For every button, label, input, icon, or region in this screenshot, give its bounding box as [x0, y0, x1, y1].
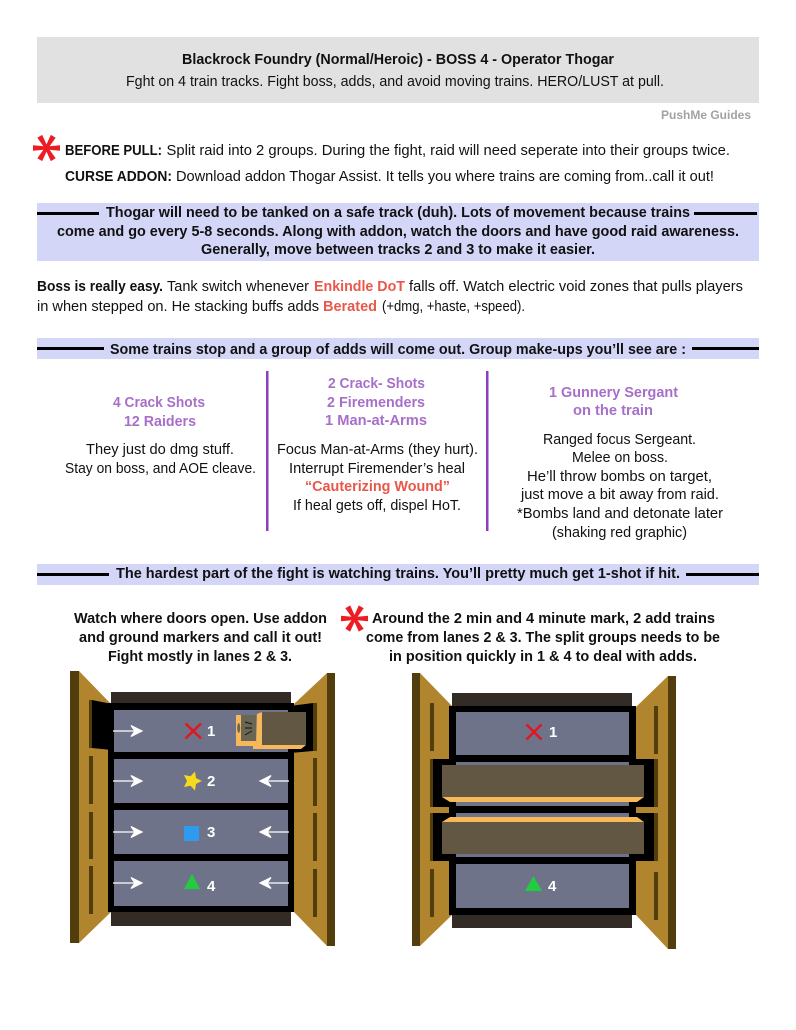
column: firemenders and man-at-arms: Interrupt Firemender’s heal: [289, 461, 465, 477]
banner: tanking advice: Thogar will need to be tanked on a safe track (duh). Lots of movement because trains: [106, 205, 690, 221]
before pull notes: Split raid into 2 groups. During the fight, raid will need seperate into their groups twice.: [166, 143, 730, 159]
column: gunnery sergeant: (shaking red graphic): [552, 525, 687, 541]
subtitle: Fght on 4 train tracks. Fight boss, adds, and avoid moving trains. HERO/LUST at pull.: [126, 73, 664, 90]
column: crack shots and raiders: 12 Raiders: [124, 414, 196, 430]
credit: PushMe Guides: [661, 108, 751, 122]
column: gunnery sergeant: 1 Gunnery Sergant: [549, 385, 678, 401]
train in lane 2: [442, 765, 644, 802]
lanes: [114, 710, 288, 906]
icon: red asterisk: [33, 135, 60, 161]
boss paragraph: Tank switch whenever: [167, 279, 309, 295]
right door: [294, 673, 335, 946]
open door right, lane 2: [630, 759, 654, 807]
before pull notes: CURSE ADDON:: [65, 169, 172, 185]
column: gunnery sergeant: [517, 385, 723, 541]
marker: red cross, lane 1: [526, 724, 542, 740]
column divider: [266, 371, 268, 531]
open door left, lane 3: [433, 813, 456, 861]
end platforms: [452, 693, 632, 706]
marker: green triangle, lane 4: [184, 874, 200, 889]
column: gunnery sergeant: *Bombs land and detonate later: [517, 506, 723, 522]
track frame: [449, 706, 636, 915]
banner: tanking advice: [37, 203, 759, 261]
lane number 1: 1: [207, 723, 215, 740]
boss paragraph: (+dmg, +haste, +speed).: [382, 299, 525, 315]
boss paragraph: Enkindle DoT: [314, 279, 405, 295]
column: gunnery sergeant: He’ll throw bombs on target,: [527, 469, 712, 485]
before pull notes: [65, 143, 730, 185]
banner: watching trains: [37, 564, 759, 585]
boss paragraph: Berated: [323, 299, 377, 315]
left diagram caption: Fight mostly in lanes 2 & 3.: [108, 649, 292, 665]
column: crack shots and raiders: 4 Crack Shots: [113, 395, 205, 411]
end platforms: [111, 692, 291, 704]
open door right, lane 3: [630, 813, 654, 861]
banner: tanking advice: Generally, move between tracks 2 and 3 to make it easier.: [201, 242, 595, 258]
boss paragraph: [37, 279, 743, 315]
track frame: [108, 703, 294, 912]
boss paragraph: falls off. Watch electric void zones that pulls players: [409, 279, 743, 295]
marker: blue square, lane 3: [184, 826, 199, 841]
boss paragraph: in when stepped on. He stacking buffs adds: [37, 299, 319, 315]
marker: yellow star, lane 2: [184, 772, 202, 790]
title banner: [37, 37, 759, 103]
right door: [636, 676, 676, 949]
lane number 4: 4: [207, 878, 216, 895]
left diagram caption: Watch where doors open. Use addon: [74, 611, 327, 627]
column: gunnery sergeant: Melee on boss.: [572, 450, 668, 466]
lane number 1: 1: [549, 724, 557, 741]
lane number 2: 2: [207, 773, 215, 790]
open door left: [92, 700, 112, 750]
banner: add groups: [37, 338, 759, 359]
column: firemenders and man-at-arms: 2 Crack- Shots: [328, 376, 425, 392]
train entering lane 1: [236, 712, 306, 749]
column: crack shots and raiders: [65, 395, 256, 477]
left diagram caption: and ground markers and call it out!: [79, 630, 322, 646]
left track diagram: [70, 671, 335, 946]
right track diagram: [412, 673, 676, 949]
lanes: [456, 712, 629, 908]
column: gunnery sergeant: just move a bit away from raid.: [520, 487, 719, 503]
column divider: [486, 371, 488, 531]
open door left, lane 2: [433, 759, 456, 807]
marker: green triangle, lane 4: [525, 876, 542, 891]
column: firemenders and man-at-arms: If heal gets off, dispel HoT.: [293, 498, 461, 514]
arrows: from left: [113, 726, 142, 888]
column: firemenders and man-at-arms: 2 Firemenders: [327, 395, 425, 411]
left diagram caption: [74, 611, 327, 665]
title: Blackrock Foundry (Normal/Heroic) - BOSS 4 - Operator Thogar: [182, 52, 614, 68]
right diagram caption: in position quickly in 1 & 4 to deal with adds.: [389, 649, 697, 665]
right diagram caption: [366, 611, 720, 665]
banner: tanking advice: come and go every 5-8 seconds. Along with addon, watch the doors and have good raid awareness.: [57, 224, 739, 240]
column: firemenders and man-at-arms: [277, 376, 478, 514]
column: firemenders and man-at-arms: 1 Man-at-Arms: [325, 413, 427, 429]
column: crack shots and raiders: They just do dmg stuff.: [86, 442, 234, 458]
column: firemenders and man-at-arms: “Cauterizing Wound”: [305, 479, 450, 495]
open door right: [290, 703, 313, 753]
left door: [412, 673, 452, 946]
before pull notes: Download addon Thogar Assist. It tells you where trains are coming from..call it out!: [176, 169, 714, 185]
column: firemenders and man-at-arms: Focus Man-at-Arms (they hurt).: [277, 442, 478, 458]
right diagram caption: come from lanes 2 & 3. The split groups needs to be: [366, 630, 720, 646]
lane number 3: 3: [207, 824, 215, 841]
train in lane 3: [442, 817, 644, 854]
arrows: from right: [260, 776, 289, 888]
column: gunnery sergeant: Ranged focus Sergeant.: [543, 432, 696, 448]
column: gunnery sergeant: on the train: [573, 403, 653, 419]
column: crack shots and raiders: Stay on boss, and AOE cleave.: [65, 461, 256, 477]
banner: watching trains: The hardest part of the fight is watching trains. You’ll pretty much get 1-shot if hit.: [116, 566, 680, 582]
before pull notes: BEFORE PULL:: [65, 143, 162, 159]
lane number 4: 4: [548, 878, 557, 895]
marker: red cross, lane 1: [186, 724, 201, 738]
banner: add groups: Some trains stop and a group of adds will come out. Group make-ups you’ll see are :: [110, 342, 686, 358]
right diagram caption: Around the 2 min and 4 minute mark, 2 add trains: [372, 611, 715, 627]
left door: [70, 671, 111, 943]
boss paragraph: Boss is really easy.: [37, 279, 163, 295]
icon: red asterisk: [341, 605, 368, 632]
